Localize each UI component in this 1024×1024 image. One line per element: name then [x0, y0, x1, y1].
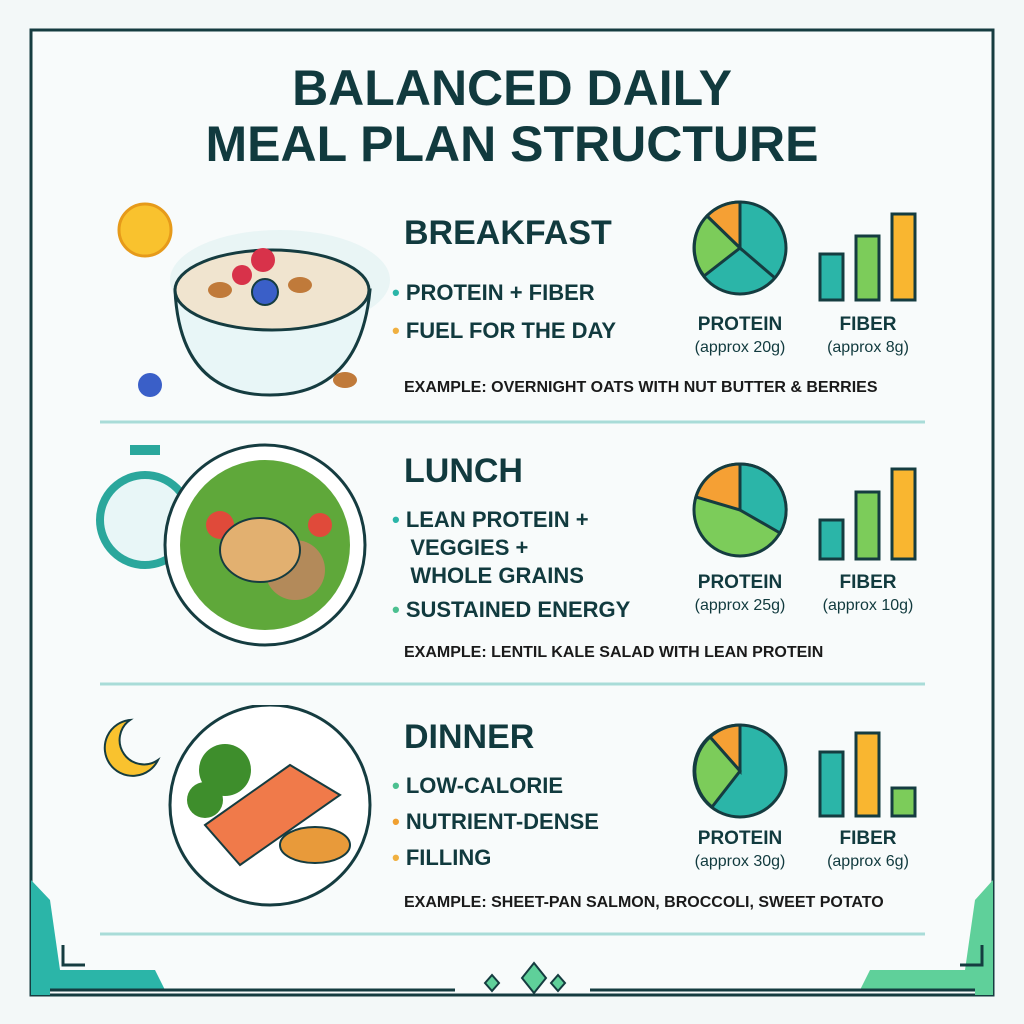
text: FIBER	[840, 314, 896, 335]
text: (approx 10g)	[823, 597, 913, 614]
icon: lunch salad with clock	[96, 444, 366, 646]
text: PROTEIN	[698, 572, 782, 593]
lunch bullets: • LEAN PROTEIN +	[392, 507, 589, 532]
dinner bullets: • FILLING	[392, 845, 491, 870]
text: (approx 25g)	[695, 597, 785, 614]
text: FIBER	[840, 828, 896, 849]
example: breakfast: EXAMPLE: OVERNIGHT OATS WITH NUT BUTTER & BERRIES	[404, 379, 877, 396]
text: PROTEIN	[698, 828, 782, 849]
lunch bullets: VEGGIES +	[410, 535, 528, 560]
title	[206, 60, 818, 172]
example: lunch: EXAMPLE: LENTIL KALE SALAD WITH LEAN PROTEIN	[404, 644, 823, 661]
title: BALANCED DAILY	[292, 60, 732, 116]
text: (approx 30g)	[695, 853, 785, 870]
text: • SUSTAINED ENERGY	[392, 597, 630, 622]
lunch bullets	[392, 507, 589, 588]
dinner bullets: • NUTRIENT-DENSE	[392, 809, 599, 834]
breakfast bullets: • FUEL FOR THE DAY	[392, 318, 616, 343]
chart labels: PROTEIN	[698, 314, 782, 335]
dinner bullets: • LOW-CALORIE	[392, 773, 563, 798]
breakfast bullets	[392, 280, 616, 343]
example: dinner: EXAMPLE: SHEET-PAN SALMON, BROCCOLI, SWEET POTATO	[404, 894, 884, 911]
heading: dinner: DINNER	[404, 718, 534, 756]
icon: dinner plate with moon	[104, 705, 372, 906]
lunch bullets: WHOLE GRAINS	[410, 563, 584, 588]
heading: lunch: LUNCH	[404, 452, 523, 490]
heading: breakfast: BREAKFAST	[404, 214, 612, 252]
text: (approx 8g)	[827, 339, 909, 356]
breakfast bullets: • PROTEIN + FIBER	[392, 280, 595, 305]
text: (approx 6g)	[827, 853, 909, 870]
icon: breakfast bowl with sun	[118, 202, 390, 397]
text: FIBER	[840, 572, 896, 593]
title: MEAL PLAN STRUCTURE	[206, 116, 818, 172]
chart labels: (approx 20g)	[695, 339, 785, 356]
chart labels	[695, 314, 785, 356]
dinner bullets	[392, 773, 599, 870]
